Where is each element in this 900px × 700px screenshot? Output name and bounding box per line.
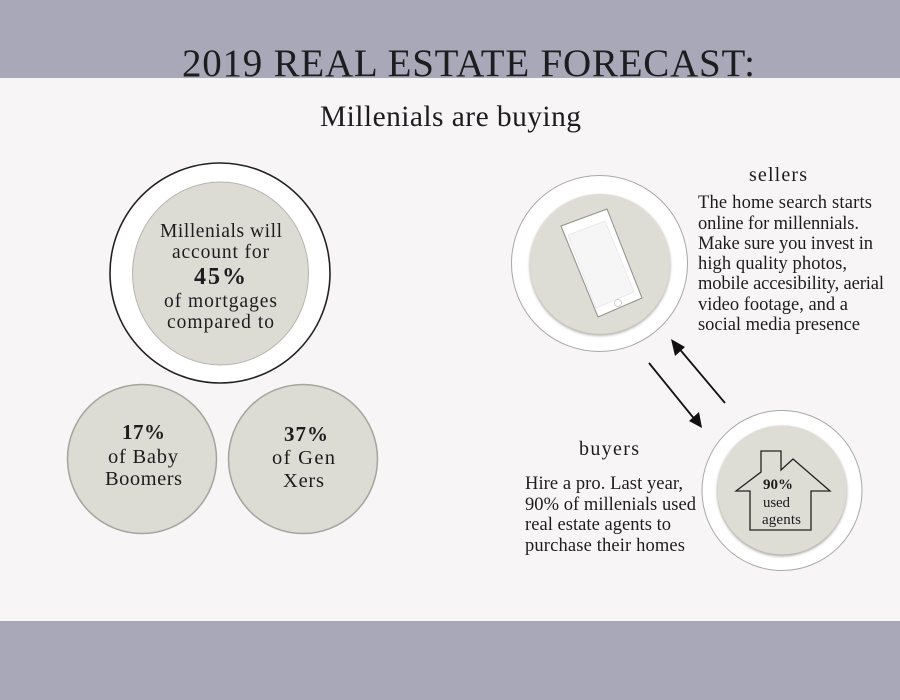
text block: buyers advice: real estate agents to [525, 515, 671, 535]
heading: sellers: sellers [749, 164, 807, 186]
icon: smartphone [561, 209, 642, 317]
arrow: up-left to sellers [671, 339, 725, 403]
panel: house circle [702, 410, 862, 570]
text block: sellers advice: online for millennials. [698, 214, 859, 234]
text block: sellers advice: mobile accesibility, aerial [698, 274, 884, 294]
panel: baby boomers circle: of Baby [108, 446, 179, 468]
panel: millennials 45% circle: account for [172, 242, 270, 263]
house label: agents [762, 512, 801, 528]
panel: millennials 45% circle: Millenials will [160, 221, 283, 242]
panel: gen xers circle: Xers [283, 470, 324, 492]
text block: buyers advice: Hire a pro. Last year, [525, 474, 683, 494]
header band [0, 0, 900, 78]
text block: sellers advice: The home search starts [698, 193, 872, 213]
icon: house [736, 451, 830, 530]
panel: baby boomers circle: Boomers [105, 468, 182, 490]
panel: baby boomers circle: 17% [122, 420, 165, 444]
text block: sellers advice: video footage, and a [698, 295, 848, 315]
panel: gen xers circle: 37% [284, 422, 328, 446]
house label: used [763, 495, 790, 511]
title: 2019 REAL ESTATE FORECAST: [182, 42, 755, 85]
heading: buyers: buyers [579, 438, 639, 460]
text block: sellers advice: Make sure you invest in [698, 234, 873, 254]
text block: buyers advice: 90% of millenials used [525, 495, 697, 515]
text block: buyers advice: purchase their homes [525, 536, 685, 556]
panel: millennials 45% circle [110, 163, 330, 383]
panel: phone circle [512, 176, 688, 352]
text block: sellers advice: high quality photos, [698, 254, 847, 274]
subtitle: Millenials are buying [320, 101, 581, 133]
panel: baby boomers circle [68, 384, 216, 534]
panel: gen xers circle [228, 384, 378, 534]
arrow: down-right to buyers [649, 363, 702, 428]
house label [762, 477, 801, 528]
footer band [0, 621, 900, 700]
text block: buyers advice [525, 474, 697, 556]
panel: millennials 45% circle: of mortgages [164, 291, 277, 312]
text block: sellers advice [698, 193, 884, 335]
panel: gen xers circle: of Gen [272, 447, 335, 469]
panel: millennials 45% circle: compared to [167, 312, 274, 333]
text block: sellers advice: social media presence [698, 315, 860, 335]
panel: millennials 45% circle: 45% [194, 264, 246, 290]
house label: 90% [763, 477, 793, 493]
